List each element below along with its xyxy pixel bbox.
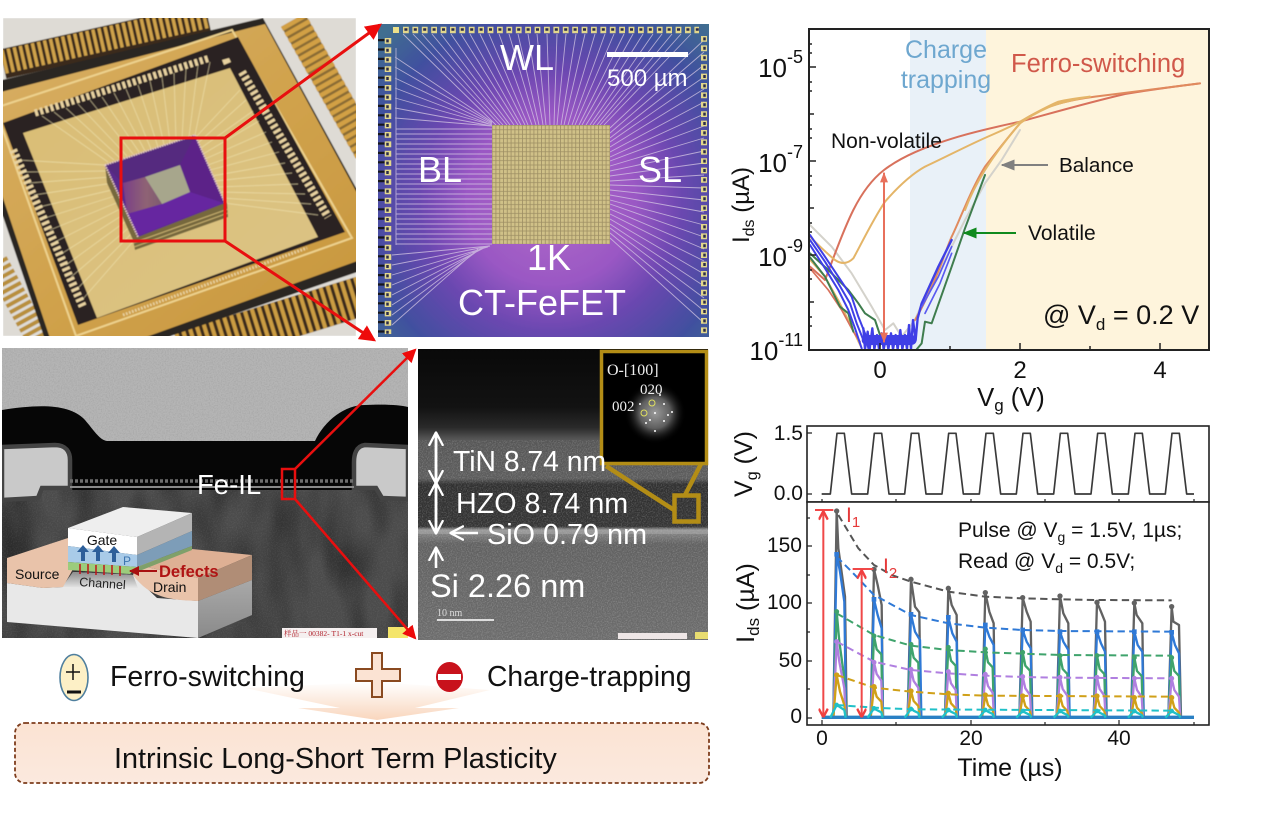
left spacer	[2, 445, 70, 500]
panel: 1K CT-FeFET micrograph	[378, 24, 709, 337]
arrow: TEM to HRTEM bottom	[295, 499, 415, 638]
label: SL: SL	[638, 149, 682, 190]
gate axis title: (V)	[730, 431, 758, 471]
label: WL: WL	[500, 37, 554, 78]
I1 and I2 arrows	[815, 510, 873, 717]
y axis title: I	[728, 236, 755, 243]
label: drain bias: = 0.2 V	[1105, 300, 1199, 330]
x axis title: V	[977, 384, 994, 412]
watermark: sample tag: 样品一 00382- T1-1 x-cut	[284, 628, 364, 638]
current y tick labels: 150	[767, 534, 802, 557]
label: plasticity: Intrinsic Long-Short Term Plasticity	[114, 743, 557, 775]
current axis title: I	[732, 636, 760, 643]
outer package pins	[0, 16, 368, 352]
device schematic	[7, 507, 252, 638]
label: CT-FeFET: CT-FeFET	[458, 282, 626, 323]
y tick labels	[749, 47, 803, 366]
arrow: chip to micrograph bottom	[225, 241, 374, 340]
gate tick labels	[774, 422, 803, 505]
current traces	[822, 511, 1194, 718]
label: pulse condition: g	[1058, 529, 1065, 545]
label: Si: Si 2.26 nm	[430, 568, 585, 604]
curves	[810, 83, 1200, 349]
y tick labels: 10	[758, 53, 787, 83]
chart: pulse response	[730, 422, 1209, 782]
label: I2: 2	[889, 565, 897, 582]
label: P: P	[123, 554, 131, 568]
label: 500 um: 500 µm	[607, 65, 688, 92]
icon: ferro dipole oval	[60, 654, 88, 700]
label: 1K: 1K	[527, 237, 571, 278]
label: Non-volatile: Non-volatile	[831, 130, 942, 153]
label: SiO: SiO 0.79 nm	[487, 519, 647, 551]
gate axis title: g	[744, 471, 761, 480]
current subplot	[732, 502, 1209, 782]
gate tick labels: 1.5	[774, 422, 803, 445]
label: I2: I	[883, 555, 889, 578]
label: drain bias: d	[1096, 315, 1105, 334]
arrow: combine into plasticity	[245, 682, 490, 720]
label: Balance: Balance	[1059, 154, 1134, 177]
box: intrinsic plasticity	[15, 723, 709, 783]
current y tick labels: 100	[767, 591, 802, 614]
label: Charge-trapping: Charge-trapping	[487, 660, 692, 692]
layer stack arrows	[436, 433, 478, 568]
gate voltage trace	[822, 433, 1194, 494]
time x tick labels: 0	[816, 727, 828, 750]
label: Ferro-switching region: Ferro-switching	[1011, 50, 1185, 78]
x tick labels	[873, 357, 1167, 384]
polarization arrows	[83, 551, 114, 562]
silicon die on package	[105, 135, 228, 250]
time axis title: Time (µs)	[957, 754, 1063, 782]
x axis title: (V)	[1004, 384, 1045, 412]
label: TiN: TiN 8.74 nm	[453, 445, 606, 477]
current y tick labels: 50	[779, 649, 802, 672]
label: Fe-IL: Fe-IL	[197, 469, 261, 500]
label: Charge trapping: trapping	[901, 66, 991, 94]
y tick labels: 10	[749, 336, 778, 366]
x tick labels: 0	[873, 357, 887, 384]
scale bar	[607, 52, 688, 57]
x axis title: g	[994, 396, 1004, 415]
y tick labels: -11	[778, 330, 803, 350]
x tick labels: 2	[1013, 357, 1027, 384]
panel: packaged chip photo	[3, 18, 356, 336]
y tick labels: 10	[758, 242, 787, 272]
label: Defects: Defects	[159, 563, 219, 581]
label: read condition: d	[1055, 560, 1063, 576]
time x tick labels	[816, 727, 1131, 750]
icon: plus sign	[356, 653, 400, 697]
red selection box on chip	[121, 138, 225, 241]
time x tick labels: 40	[1107, 727, 1131, 750]
label: Charge trapping: Charge	[905, 36, 987, 64]
label: drain bias: @ V	[1043, 300, 1096, 330]
y tick labels: -9	[787, 236, 803, 256]
label: HZO: HZO 8.74 nm	[456, 488, 628, 520]
time x tick labels: 20	[959, 727, 983, 750]
gate tick labels: 0.0	[774, 482, 803, 505]
label: Channel: Channel	[79, 575, 126, 592]
plot background bands	[809, 29, 1209, 350]
gate pulse subplot	[730, 422, 1209, 505]
label: pulse condition: Pulse @ V	[958, 519, 1058, 542]
label: 020: 020	[640, 382, 662, 398]
label: pulse condition: = 1.5V, 1µs;	[1065, 519, 1182, 542]
bond pads	[381, 27, 704, 334]
label: Ferro-switching: Ferro-switching	[110, 661, 305, 693]
label: read condition: = 0.5V;	[1063, 550, 1135, 573]
watermark logo	[695, 632, 708, 639]
label: 002: 002	[612, 399, 634, 415]
right spacer	[354, 445, 408, 499]
label: BL: BL	[418, 149, 462, 190]
current axis title: ds	[744, 618, 763, 636]
label: O-[100]: O-[100]	[607, 362, 659, 379]
decay trend lines	[837, 515, 1172, 711]
gate axis title: V	[730, 480, 758, 497]
scale bar 10 nm: 10 nm	[437, 608, 462, 619]
watermark tag	[618, 633, 687, 639]
arrow: TEM to HRTEM top	[295, 350, 415, 469]
y tick labels: -7	[787, 142, 803, 162]
arrow: chip to micrograph top	[225, 25, 380, 138]
arrow: Balance	[1002, 164, 1048, 166]
y tick labels: 10	[758, 148, 787, 178]
current y tick labels	[767, 534, 802, 728]
label: I1: I	[846, 504, 852, 527]
label: I1: 1	[852, 514, 860, 531]
current axis title: (µA)	[732, 563, 760, 618]
red selection box on TEM	[282, 469, 295, 499]
y tick labels: -5	[787, 47, 803, 67]
zoom guide	[606, 464, 701, 522]
chart: transfer curves	[728, 29, 1209, 415]
scale bar 10 nm	[437, 608, 494, 621]
icon: charge trapping minus	[436, 662, 463, 692]
defect ticks	[80, 564, 120, 576]
arrow: defects	[130, 570, 157, 572]
label: Volatile: Volatile	[1028, 222, 1096, 245]
word, bit and source lines	[392, 34, 704, 325]
inset: FFT diffraction	[602, 352, 706, 464]
panel: high-resolution TEM	[418, 349, 708, 640]
bonding wires	[18, 62, 318, 300]
current y tick labels: 0	[790, 705, 802, 728]
label: Drain: Drain	[153, 579, 186, 595]
peak markers	[837, 511, 1172, 711]
axes frame and ticks	[809, 29, 1209, 350]
label: Gate: Gate	[87, 532, 117, 548]
y axis title: ds	[741, 219, 758, 236]
label: Charge trapping	[901, 36, 991, 94]
y axis title: (µA)	[728, 167, 755, 219]
label: Source: Source	[15, 566, 60, 582]
x tick labels: 4	[1153, 357, 1167, 384]
label: read condition: Read @ V	[958, 550, 1055, 573]
watermark: logo	[388, 627, 408, 638]
panel: cross-section TEM	[2, 348, 408, 638]
arrow: Volatile	[964, 232, 1016, 234]
